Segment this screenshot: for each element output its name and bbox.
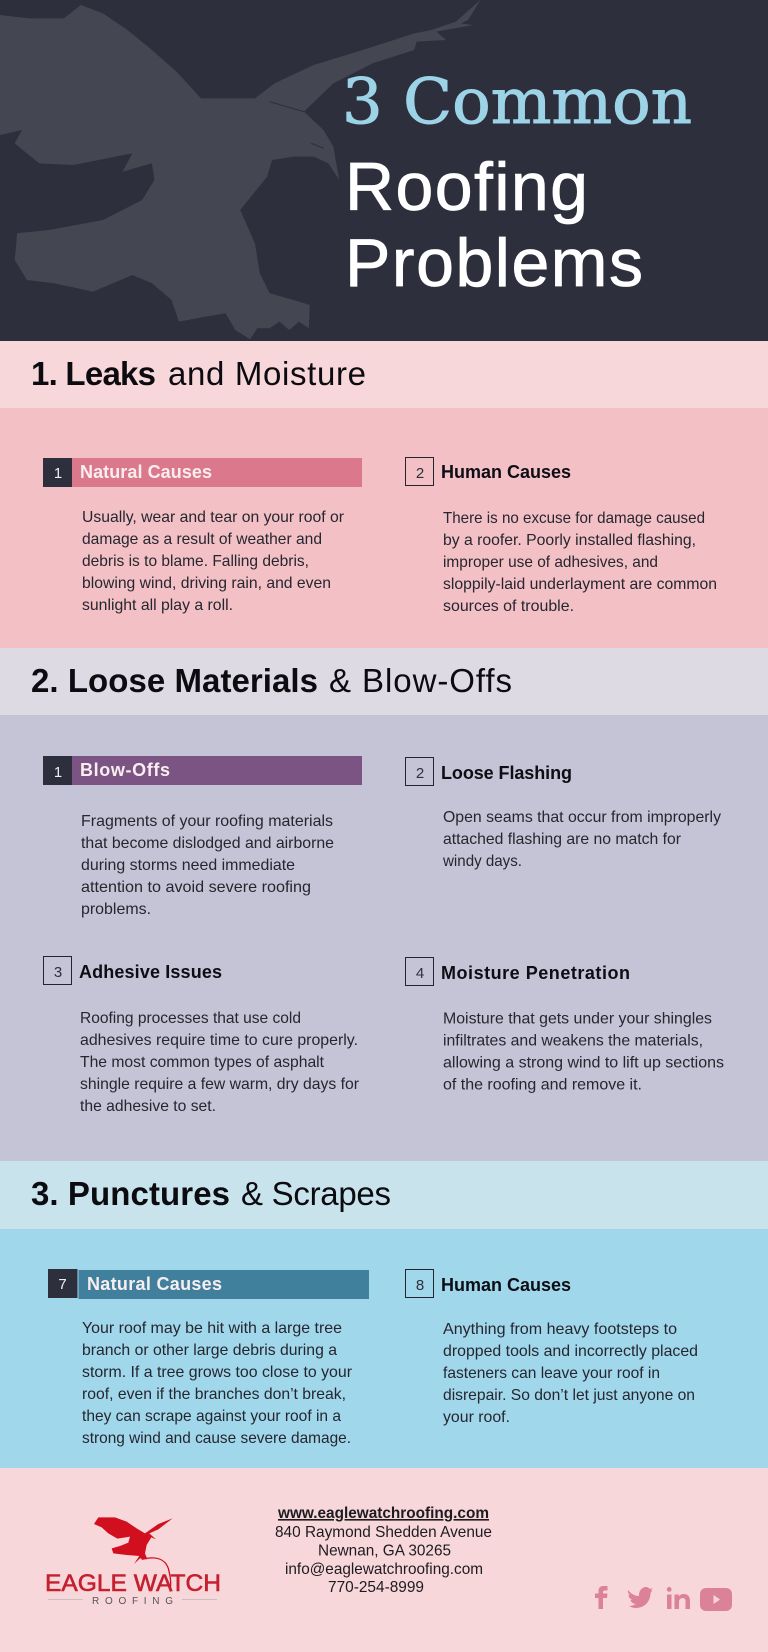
heading: 3. Punctures & Scrapes: & Scrapes	[241, 1175, 391, 1212]
subheading: 2 Human Causes: 2	[416, 465, 424, 482]
subheading: 1 Natural Causes	[43, 458, 362, 487]
contact details: 840 Raymond Shedden Avenue	[275, 1524, 492, 1541]
text: human causes: by a roofer. Poorly installed flashing,	[443, 532, 696, 549]
text: natural causes: sunlight all play a roll.	[82, 597, 233, 614]
subheading: 2 Loose Flashing	[406, 758, 572, 786]
logo: Eagle Watch Roofing: ROOFING	[92, 1596, 173, 1607]
text: loose flashing: Open seams that occur from improperly	[443, 809, 721, 826]
text: natural causes: blowing wind, driving rain, and even	[82, 575, 331, 592]
panel: section 2 heading band	[0, 648, 768, 715]
subheading: 2 Loose Flashing: 2	[416, 765, 424, 782]
text: blow-offs	[81, 813, 334, 918]
icon: facebook	[595, 1586, 608, 1609]
text: natural causes of punctures: they can scrape against your roof in a	[82, 1408, 341, 1425]
subheading: 1 Natural Causes: 1	[54, 465, 62, 482]
panel: section 1 heading band	[0, 341, 768, 408]
icon: eagle silhouette	[0, 0, 480, 339]
text: human causes: There is no excuse for damage caused	[443, 510, 705, 527]
logo: Eagle Watch Roofing	[45, 1517, 221, 1607]
title: Roofing Problems: Problems	[345, 225, 643, 301]
subheading: 1 Natural Causes: Natural Causes	[80, 462, 212, 482]
text: natural causes: damage as a result of weather and	[82, 531, 322, 548]
text: adhesive issues: The most common types of asphalt	[80, 1054, 325, 1071]
title: Roofing Problems	[345, 149, 643, 301]
text: human causes of punctures: disrepair. So don’t let just anyone on	[443, 1387, 695, 1404]
text: natural causes: Usually, wear and tear on your roof or	[82, 509, 345, 526]
subheading: 2 Loose Flashing: Loose Flashing	[441, 763, 572, 783]
subheading: 2 Human Causes	[406, 458, 571, 486]
text: human causes of punctures: dropped tools and incorrectly placed	[443, 1343, 698, 1360]
text: moisture penetration: of the roofing and remove it.	[443, 1076, 642, 1094]
title: 3 Common: 3 Common	[342, 65, 692, 138]
icon: twitter	[628, 1587, 652, 1608]
text: natural causes of punctures: branch or other large debris during a	[82, 1342, 337, 1359]
text: human causes of punctures: Anything from heavy footsteps to	[443, 1321, 677, 1338]
subheading: 1 Blow-Offs: 1	[54, 764, 62, 781]
text: human causes of punctures: fasteners can leave your roof in	[443, 1365, 660, 1382]
text: loose flashing: windy days.	[442, 853, 522, 870]
heading: 3. Punctures & Scrapes	[31, 1175, 391, 1212]
text: human causes: sources of trouble.	[443, 598, 574, 615]
panel: section 3 body	[0, 1229, 768, 1468]
text: natural causes: debris is to blame. Falling debris,	[82, 553, 309, 570]
panel: header	[0, 0, 768, 341]
subheading: 7 Natural Causes: Natural Causes	[87, 1274, 222, 1294]
panel: footer	[0, 1468, 768, 1652]
heading: 1. Leaks and Moisture	[31, 355, 366, 392]
contact details: 770-254-8999	[328, 1579, 424, 1596]
subheading: 4 Moisture Penetration: Moisture Penetration	[441, 963, 630, 983]
logo: Eagle Watch Roofing: EAGLE WATCH	[45, 1570, 221, 1597]
panel: section 1 body	[0, 408, 768, 648]
icon: linkedin	[667, 1587, 690, 1609]
subheading: 8 Human Causes: Human Causes	[441, 1275, 571, 1295]
text: adhesive issues: the adhesive to set.	[80, 1098, 216, 1115]
text: blow-offs: problems.	[81, 901, 151, 918]
heading: 1. Leaks and Moisture: and Moisture	[168, 355, 366, 392]
text: loose flashing	[442, 809, 721, 870]
subheading: 4 Moisture Penetration	[406, 958, 630, 986]
text: moisture penetration: infiltrates and weakens the materials,	[443, 1032, 703, 1050]
text: blow-offs: during storms need immediate	[81, 857, 295, 874]
title: Roofing Problems: Roofing	[345, 149, 588, 225]
heading: 3. Punctures & Scrapes: 3. Punctures	[31, 1175, 230, 1212]
text: moisture penetration: allowing a strong wind to lift up sections	[443, 1054, 724, 1072]
contact details	[275, 1505, 492, 1596]
subheading: 1 Blow-Offs	[43, 756, 362, 785]
subheading: 1 Blow-Offs: Blow-Offs	[80, 760, 170, 780]
icons: social media	[595, 1586, 732, 1611]
subheading: 3 Adhesive Issues: 3	[54, 964, 62, 981]
text: loose flashing: attached flashing are no match for	[443, 831, 682, 848]
text: natural causes of punctures: roof, even if the branches don’t break,	[82, 1386, 346, 1403]
panel: section 2 body	[0, 715, 768, 1161]
subheading: 7 Natural Causes: 7	[58, 1276, 67, 1293]
subheading: 3 Adhesive Issues	[44, 956, 222, 984]
text: natural causes of punctures: strong wind and cause severe damage.	[82, 1430, 351, 1447]
text: blow-offs: Fragments of your roofing materials	[81, 813, 333, 830]
heading: 1. Leaks and Moisture: 1. Leaks	[31, 355, 156, 392]
text: natural causes of punctures	[82, 1320, 353, 1447]
text: adhesive issues: shingle require a few warm, dry days for	[80, 1076, 360, 1093]
text: blow-offs: attention to avoid severe roofing	[81, 879, 311, 896]
subheading: 7 Natural Causes	[48, 1269, 369, 1299]
subheading: 8 Human Causes	[406, 1270, 571, 1298]
icon: youtube	[700, 1588, 732, 1611]
text: moisture penetration	[443, 1010, 724, 1094]
heading: 2. Loose Materials & Blow-Offs	[31, 662, 512, 699]
text: natural causes of punctures: storm. If a tree grows too close to your	[82, 1364, 353, 1381]
subheading: 4 Moisture Penetration: 4	[416, 965, 424, 982]
text: human causes of punctures: your roof.	[443, 1409, 510, 1426]
subheading: 8 Human Causes: 8	[416, 1277, 424, 1294]
text: blow-offs: that become dislodged and airborne	[81, 835, 334, 852]
subheading: 2 Human Causes: Human Causes	[441, 462, 571, 482]
text: human causes of punctures	[443, 1321, 698, 1426]
text: adhesive issues: Roofing processes that use cold	[80, 1010, 301, 1027]
text: adhesive issues: adhesives require time to cure properly.	[80, 1032, 358, 1049]
text: human causes: improper use of adhesives, and	[443, 554, 658, 571]
text: natural causes	[82, 509, 345, 614]
text: human causes	[443, 510, 717, 615]
panel: section 3 heading band	[0, 1161, 768, 1229]
heading: 2. Loose Materials & Blow-Offs: 2. Loose Materials	[31, 662, 318, 699]
heading: 2. Loose Materials & Blow-Offs: & Blow-Offs	[329, 662, 512, 699]
text: adhesive issues	[80, 1010, 360, 1115]
text: human causes: sloppily-laid underlayment are common	[443, 576, 717, 593]
contact details: Newnan, GA 30265	[318, 1542, 451, 1560]
subheading: 3 Adhesive Issues: Adhesive Issues	[79, 962, 222, 982]
contact details: www.eaglewatchroofing.com	[277, 1505, 489, 1522]
contact details: info@eaglewatchroofing.com	[285, 1561, 483, 1578]
text: natural causes of punctures: Your roof may be hit with a large tree	[82, 1320, 342, 1337]
text: moisture penetration: Moisture that gets under your shingles	[443, 1010, 712, 1028]
